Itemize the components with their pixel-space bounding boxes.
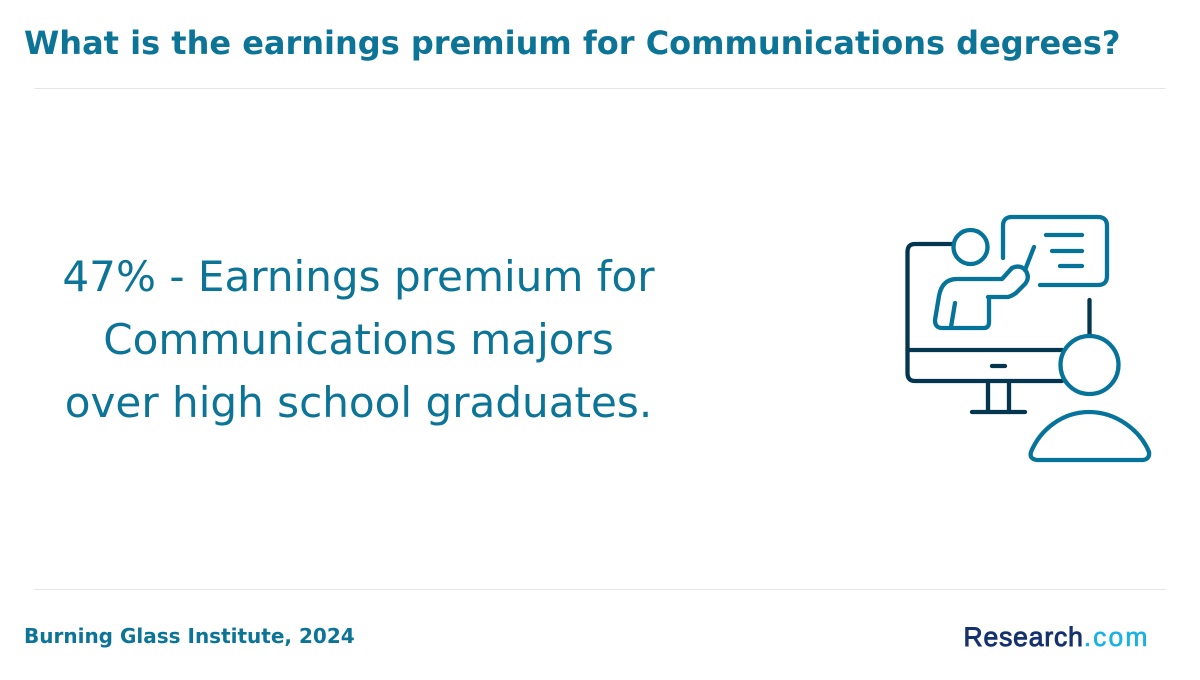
main statistic text: over high school graduates. [65,378,652,427]
title: What is the earnings premium for Communications degrees? [24,24,1120,62]
logo: Research.com [964,622,1150,652]
main statistic text: 47% - Earnings premium for [62,252,655,301]
main statistic text: Communications majors [103,315,614,364]
source: Burning Glass Institute, 2024 [24,624,355,648]
main statistic text [62,252,655,427]
